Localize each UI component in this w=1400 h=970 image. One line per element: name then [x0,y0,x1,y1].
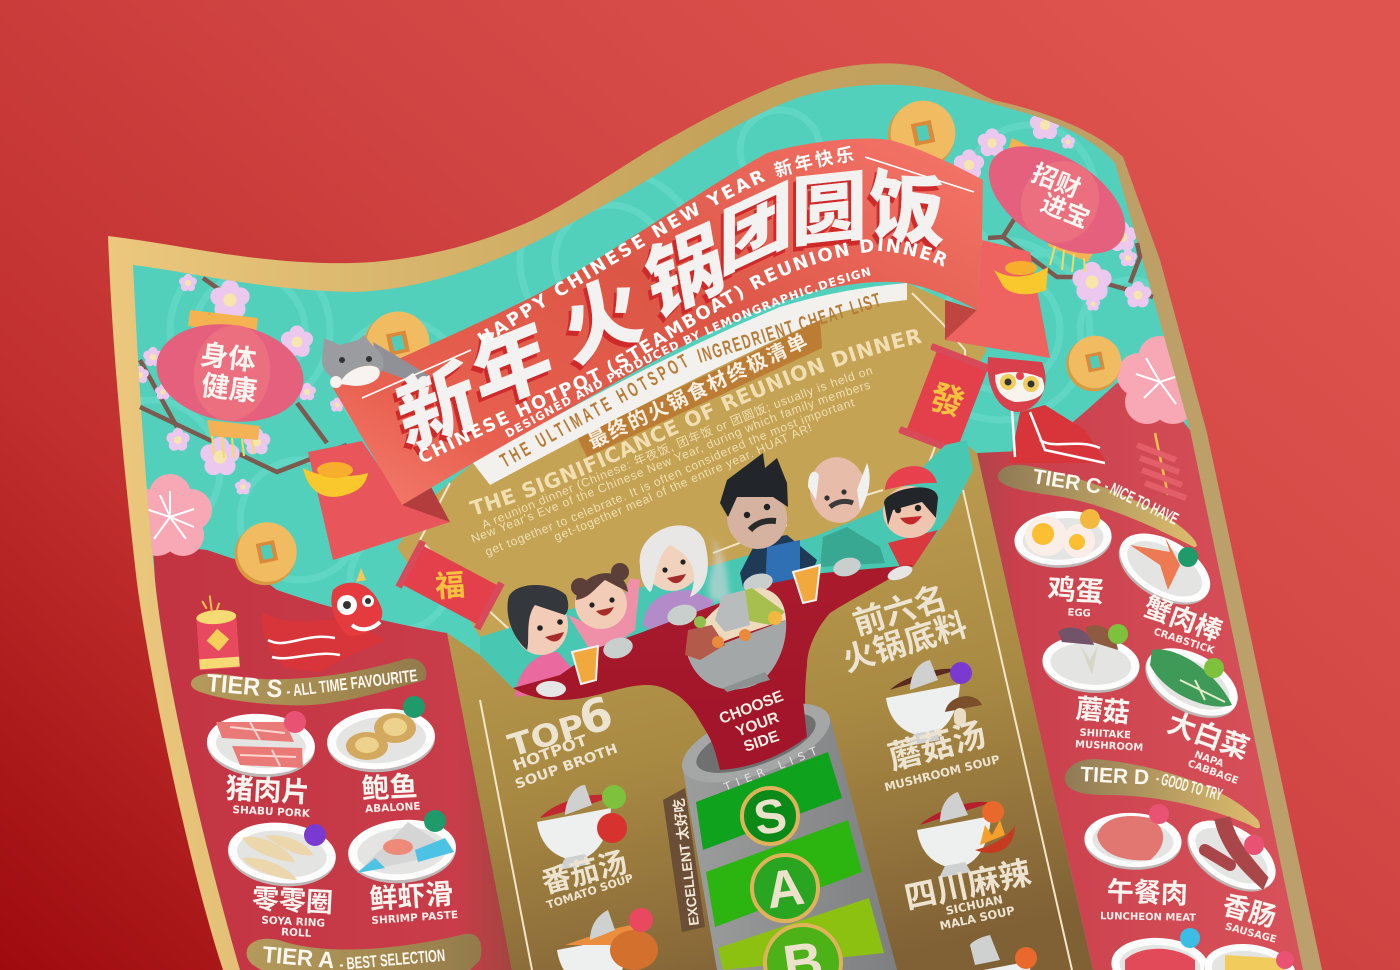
heading: top 6: HOTPOT [510,731,590,775]
icon: gold coins [235,101,1121,585]
plate: luncheon meat [1083,804,1183,872]
scroll text: 發 [925,378,968,424]
lantern text: 身体 [198,339,258,376]
label: sausage: 香肠 [1219,890,1279,933]
soup: tomato: TOMATO SOUP [545,872,635,912]
banner tails [308,240,1050,560]
plate: fish [1109,928,1210,970]
excellent tag [663,788,705,932]
plate: egg [1013,508,1114,571]
icon: gold ingots [303,261,1048,497]
cherry blossoms [131,109,1151,494]
label: egg: 鸡蛋 [1047,573,1105,608]
strip text end: INGREDRIENT CHEAT LIST [695,289,883,368]
title banner: CHINESE HOTPOT (STEAMBOAT) REUNION DINNER [419,238,946,462]
right tail [945,240,1050,358]
right lion dance [988,357,1107,463]
heading: top 6: TOP [504,707,589,765]
strip text: 最终的火锅食材终极清单 [584,329,811,454]
scroll: fu [395,540,505,630]
tier list label: TIER LIST [721,742,825,794]
plate: shabu pork [205,710,317,781]
significance text block [468,329,922,558]
blossom branches [140,210,1153,472]
tier pill [1065,759,1260,828]
plate: noodles [1201,938,1299,970]
big Chinese title [389,163,945,467]
red table and funnel [513,565,913,770]
brown strip [577,320,822,457]
icon: large pink blossom left [147,474,212,556]
heading: top six Chinese: 前六名 [849,579,951,642]
label: shrimp paste: 鲜虾滑 [368,878,454,915]
right column: tier C: EGG [1067,607,1091,620]
right column: tier C: SHIITAKE [1079,728,1131,741]
right column: tier D [1065,759,1299,970]
right red panel [977,383,1303,970]
banner ribbon [333,138,983,505]
heading: top 6: 6 [572,686,619,747]
left column: tier S [191,659,459,940]
plate: abalone [325,696,438,777]
soup: sichuan mala: SICHUAN [944,892,1004,918]
choose your side: YOUR [734,709,781,740]
icon: left lantern [149,310,311,458]
credit line [508,276,868,438]
choose your side: SIDE [742,728,781,756]
label: crabstick: 蟹肉棒 [1140,592,1226,647]
left column: tier S: ROLL [281,926,312,940]
heading: top 6: SOUP BROTH [513,741,620,793]
tier title: TIER D [1080,763,1150,790]
paragraph: get together to celebrate. It is often considered the most important [486,398,855,558]
plate: napa cabbage [1134,634,1249,732]
plate: crabstick [1107,519,1222,619]
tier tagline: - ALL TIME FAVOURITE [285,666,419,701]
label: napa cabbage: 大白菜 [1163,707,1253,765]
tier bar B [718,898,884,970]
mother [507,585,575,697]
big Chinese title: 火 [554,263,651,380]
tier badge A [752,855,818,921]
choose your side: CHOOSE [717,688,786,728]
soup: tomato [537,785,635,912]
strip text start: THE ULTIMATE HOTSPOT [497,351,692,472]
plate: shiitake [1040,624,1142,697]
right column: tier C: CABBAGE [1186,758,1240,787]
tier tagline: - NICE TO HAVE [1101,477,1181,529]
family table [480,440,973,770]
left fold [402,485,450,522]
left column: tier S: SHABU PORK [232,804,311,820]
scroll: fa [898,343,996,457]
icon: right lantern: 进宝 [1037,189,1093,234]
tier pill [247,934,481,970]
big Chinese title: 圆 [791,164,867,257]
heading: top six Chinese: 火锅底料 [838,607,971,678]
soup: mushroom: MUSHROOM SOUP [883,752,1001,794]
drinks and small bowls [536,555,914,697]
hotpot bowl [685,588,786,692]
right column: tier C: NAPA [1193,749,1225,770]
excellent tag: EXCELLENT 太好吃 [670,798,702,927]
icon: left lantern: 健康 [199,370,259,407]
right fold [945,300,977,340]
tier badge S: S [750,789,791,846]
gold centre panel upper [397,283,987,637]
icon: right lantern [970,124,1144,276]
can rim [672,687,840,799]
cat [322,335,430,388]
tier badge A: A [763,858,808,920]
steam [709,535,735,605]
big Chinese title: 团 [719,170,793,288]
tier pill [191,659,426,705]
left column: tier S: SOYA RING [261,914,325,930]
right column: tier D: SAUSAGE [1224,921,1278,946]
tier bar A [706,820,862,927]
paragraph: A reunion dinner (Chinese: 年夜饭, 团年饭 or 团圆饭; usually is held on [484,368,872,529]
choose your side [717,688,786,756]
girl [568,563,640,650]
big Chinese title: 年 [464,308,561,425]
firecracker can left [195,594,240,670]
soup: chicken [557,908,658,970]
greeting line [483,160,858,346]
left column: tier A [247,934,481,970]
label: abalone: 鲍鱼 [361,771,418,804]
tier title: TIER S [205,669,284,704]
plate: shrimp paste [346,810,459,888]
tier pill [998,465,1197,547]
heading [473,343,920,516]
grandmother [640,525,713,640]
grandpa [806,453,885,567]
can body [683,717,897,970]
teal strip behind family [480,440,973,700]
label: 番茄汤 [538,846,631,900]
tier title: TIER C [1031,465,1103,499]
soup: sichuan mala [901,792,1034,933]
gold centre panel lower [447,445,1093,970]
tier list can [663,687,897,970]
right column: tier C [998,465,1253,787]
cheat list strip [473,283,907,485]
father [720,453,817,595]
subtitle line [422,251,952,464]
label: luncheon meat: 午餐肉 [1106,877,1188,909]
soup: mushroom [883,660,1001,794]
plate: sausage [1175,806,1288,906]
soup: bottom right [957,935,1037,970]
label: soya ring roll: 零零圈 [251,884,334,918]
label: shabu pork: 猪肉片 [225,773,310,808]
big Chinese title: 饭 [869,163,945,258]
left tail [308,441,450,560]
label: shiitake: 蘑菇 [1075,694,1131,728]
Chinese sub-strip [577,320,822,457]
title banner [322,138,983,505]
left column: tier S: SHRIMP PASTE [371,909,459,927]
right column: tier C: CRABSTICK [1152,627,1217,657]
big Chinese title: 锅 [640,212,731,334]
tier tagline: - GOOD TO TRY [1154,769,1225,805]
lantern text: 招财 [1028,159,1084,204]
decorative rule lines [362,157,974,398]
firecrackers right [1137,433,1186,498]
title banner: HAPPY CHINESE NEW YEAR 新年快乐 [477,146,854,345]
scroll text: 福 [434,569,466,604]
left column: tier S: ABALONE [365,801,421,815]
right column: tier C: MUSHROOM [1075,739,1144,754]
title banner: DESIGNED AND PRODUCED BY LEMONGRAPHIC.DESIGN [504,267,870,438]
right column: tier D: LUNCHEON MEAT [1100,911,1196,924]
boy [883,466,938,567]
label: 四川麻辣 [901,854,1034,916]
paragraph: get-together meal of the entire year. HUAT AR! [554,423,812,542]
big Chinese title: 新 [389,350,486,467]
left lion dance [262,568,387,672]
label: 蘑菇汤 [884,715,990,777]
icon: large pink blossom right [1117,336,1187,424]
heading: top 6 [504,686,620,793]
paragraph: New Year's Eve of the Chinese New Year, during which family members [471,382,870,542]
tier bar S [696,752,842,850]
plate: soya ring roll [225,818,339,891]
left red panel [153,547,512,970]
funnel end [687,700,807,770]
tier badge B [765,925,841,970]
white frame lines [420,293,1072,970]
white strip [473,283,907,485]
soup: sichuan mala: MALA SOUP [938,903,1016,933]
